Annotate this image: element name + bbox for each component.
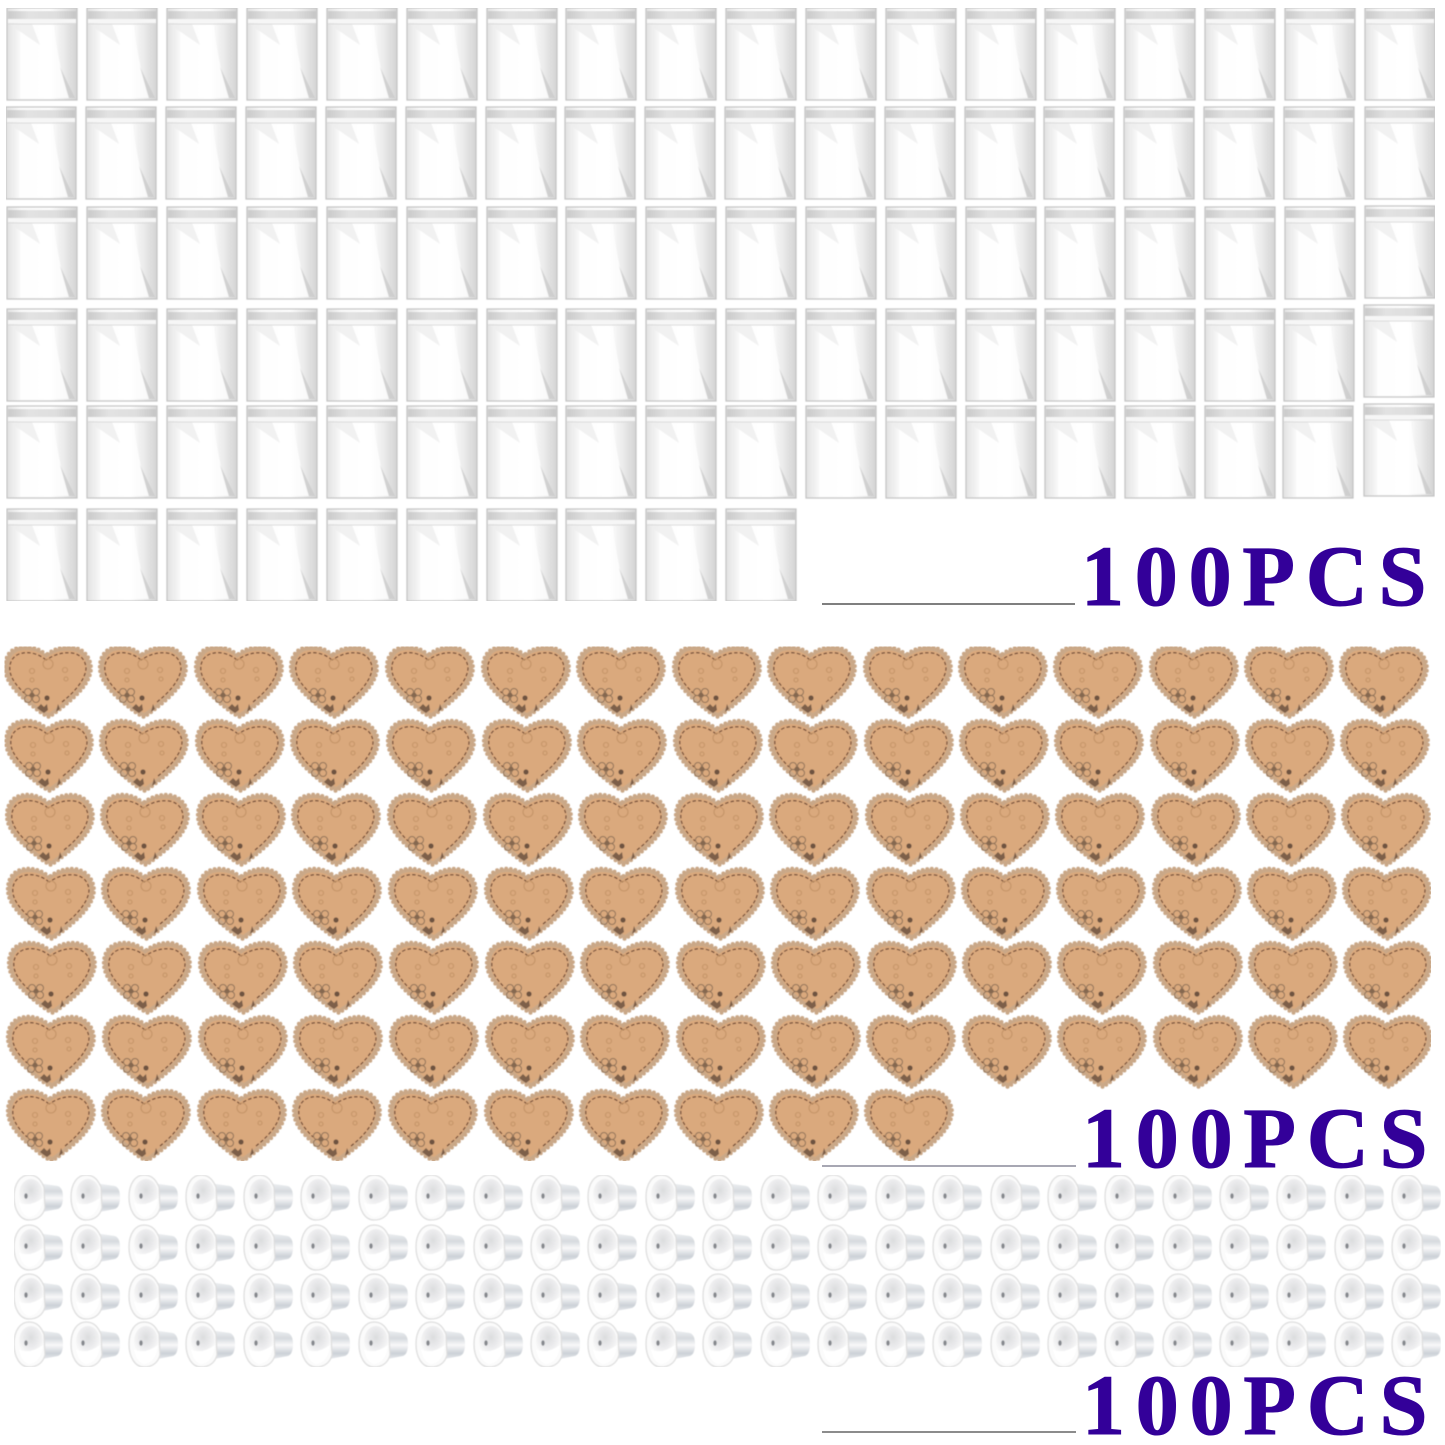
- bags row 2: [6, 107, 1435, 199]
- hearts row 3: [7, 795, 1429, 865]
- panel: clear zip bags: [6, 8, 1435, 601]
- panel: heart earring cards: [5, 647, 1431, 1161]
- bags row 3: [7, 206, 1435, 299]
- hearts row 2: [6, 721, 1428, 791]
- bags row 6: [7, 509, 796, 601]
- bags row 1: [7, 8, 1435, 100]
- panel: clear silicone earring backs: [14, 1175, 1441, 1367]
- hearts row 5: [9, 943, 1431, 1013]
- backs row 1: [14, 1175, 1441, 1220]
- hearts row 7: [8, 1091, 952, 1161]
- backs row 4: [14, 1322, 1441, 1367]
- label: bags quantity: 100PCS: [1081, 528, 1437, 624]
- hearts row 1: [5, 647, 1427, 717]
- hearts row 4: [8, 869, 1430, 939]
- bags row 4: [7, 305, 1434, 401]
- backs row 2: [14, 1225, 1441, 1270]
- backs row 3: [14, 1274, 1441, 1319]
- label: cards quantity: 100PCS: [1082, 1090, 1438, 1186]
- hearts row 6: [8, 1017, 1431, 1087]
- bags row 5: [7, 404, 1434, 498]
